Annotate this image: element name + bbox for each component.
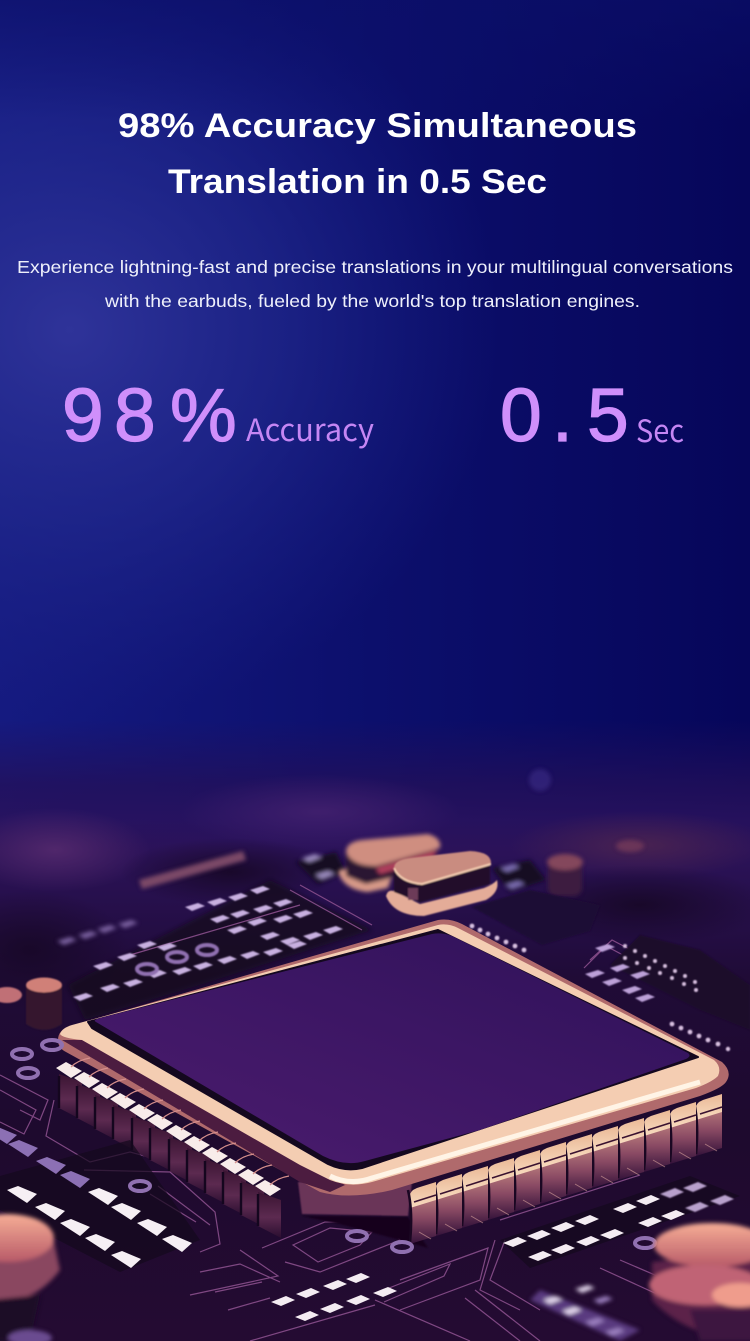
pins: front-left edge xyxy=(56,1058,289,1238)
channel between frame and pins xyxy=(62,1040,345,1192)
pads: bottom right foreground xyxy=(530,1285,640,1341)
chip shadow gap xyxy=(88,930,698,1169)
description text: with the earbuds, fueled by the world's top translation engines. xyxy=(104,291,640,311)
processor chip xyxy=(58,920,729,1196)
under-chip shadow xyxy=(302,1216,428,1248)
crystal: back xyxy=(338,834,440,892)
dark area behind pad grid xyxy=(68,880,372,1020)
pins: front-right edge xyxy=(408,1094,722,1244)
stat: 98% accuracy: Accuracy xyxy=(246,405,374,450)
solder dots and pad grid, right xyxy=(470,924,730,1051)
circuit board photo xyxy=(0,769,750,1341)
crystal: front xyxy=(386,851,498,916)
blurred strip and pads, far xyxy=(57,769,644,945)
chip underside xyxy=(298,1182,412,1216)
blurred background haze xyxy=(0,774,750,1010)
board base xyxy=(0,820,750,1341)
description text xyxy=(17,257,733,311)
heading xyxy=(118,107,637,201)
chip pink rim xyxy=(58,920,729,1196)
pad grid, upper left xyxy=(73,886,343,1001)
crystal oscillators xyxy=(338,834,498,916)
via rings xyxy=(12,1040,655,1252)
pads: bottom left xyxy=(0,1127,200,1272)
stat: 98% accuracy xyxy=(62,373,374,457)
capacitor: bottom right xyxy=(649,1223,750,1341)
stat: 0.5 sec: 0.5 xyxy=(500,373,629,457)
chip top surface xyxy=(95,933,690,1163)
chip metal frame xyxy=(60,924,719,1185)
pads: bottom centre xyxy=(271,1273,397,1321)
heading: Translation in 0.5 Sec xyxy=(168,163,547,201)
stat: 98% accuracy: 98% xyxy=(62,373,237,457)
dark IC, right xyxy=(610,935,750,1030)
heading: 98% Accuracy Simultaneous xyxy=(118,107,637,145)
stat: 0.5 sec: Sec xyxy=(636,406,684,451)
stat: 0.5 sec xyxy=(500,373,684,457)
capacitor: bottom left xyxy=(0,1214,60,1341)
pads: bottom right xyxy=(500,1176,740,1268)
small capacitors, left xyxy=(0,978,62,1030)
chip bright lip xyxy=(330,1082,700,1182)
dark IC, behind crystals xyxy=(472,890,600,945)
description text: Experience lightning-fast and precise translations in your multilingual conversations xyxy=(17,257,733,277)
circuit traces xyxy=(0,885,690,1341)
